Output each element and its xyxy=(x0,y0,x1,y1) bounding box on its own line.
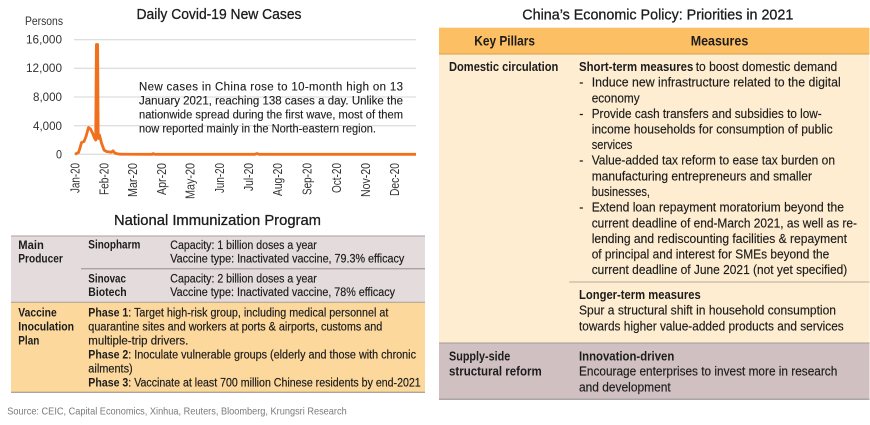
short-term measures xyxy=(579,60,857,277)
y axis labels: 8,000 xyxy=(33,90,62,104)
phase 1: Phase 1 xyxy=(88,308,129,320)
producer: sinovac biotech: Biotech xyxy=(88,287,127,299)
producer: sinopharm: Sinopharm xyxy=(88,240,140,252)
y axis labels: 0 xyxy=(56,148,62,162)
innovation-driven: and development xyxy=(579,380,671,394)
row: supply-side structural reform xyxy=(439,343,870,399)
short-term measures: - xyxy=(579,154,583,168)
annotation text: New cases in China rose to 10-month high on 13 xyxy=(139,82,403,94)
short-term measures: - xyxy=(579,107,583,121)
innovation-driven: Encourage enterprises to invest more in research xyxy=(579,365,837,379)
label: supply-side structural reform: structural reform xyxy=(449,365,542,379)
panel: china's economic policy xyxy=(439,6,870,399)
row: vaccine inoculation plan xyxy=(11,302,425,392)
y axis labels: 4,000 xyxy=(33,119,62,133)
panel: daily covid-19 new cases xyxy=(25,6,416,199)
label: main producer xyxy=(18,240,63,265)
longer-term measures xyxy=(579,288,844,333)
label: vaccine inoculation plan xyxy=(18,308,74,348)
x axis month labels: Oct-20 xyxy=(330,163,344,193)
annotation text: January 2021, reaching 138 cases a day. Unlike the xyxy=(139,95,403,107)
row: domestic circulation xyxy=(439,54,870,343)
label: domestic circulation: Domestic circulation xyxy=(449,60,558,74)
producer: sinovac biotech: Capacity: 2 billion doses a year xyxy=(170,274,317,286)
row: main producer xyxy=(11,236,425,302)
short-term measures: lending and rediscounting facilities & repayment xyxy=(592,232,847,246)
short-term measures: Value-added tax reform to ease tax burden on xyxy=(592,154,835,168)
innovation-driven xyxy=(579,349,837,394)
producer: sinovac biotech: Sinovac xyxy=(88,274,127,286)
producer: sinopharm xyxy=(88,240,405,265)
short-term measures: businesses, xyxy=(592,185,650,199)
x axis month labels: Mar-20 xyxy=(126,163,140,197)
short-term measures: - xyxy=(579,76,583,90)
short-term measures: services xyxy=(592,138,632,152)
short-term measures: to boost domestic demand xyxy=(696,60,837,74)
phase 1: multiple-trip drivers. xyxy=(88,336,188,348)
x axis month labels: Feb-20 xyxy=(97,163,111,195)
producer: sinopharm: Capacity: 1 billion doses a year xyxy=(170,240,317,252)
heading: daily covid-19 new cases: Daily Covid-19 New Cases xyxy=(136,6,302,23)
short-term measures: of principal and interest for SMEs beyond the xyxy=(592,248,829,262)
short-term measures: Provide cash transfers and subsidies to low- xyxy=(592,107,822,121)
panel: national immunization program xyxy=(11,212,425,392)
orange case line xyxy=(75,44,416,154)
short-term measures: economy xyxy=(592,91,640,105)
phase 3: Phase 3 xyxy=(88,378,128,390)
line chart: daily new cases xyxy=(25,14,416,199)
x axis month labels: May-20 xyxy=(184,163,198,199)
label: supply-side structural reform xyxy=(449,349,542,379)
annotation text: nationwide spread during the first wave, most of them xyxy=(139,109,403,121)
annotation text xyxy=(139,82,403,135)
label: main producer: Main xyxy=(18,240,44,252)
producer: sinovac biotech: Vaccine type: Inactivated vaccine, 78% efficacy xyxy=(170,287,395,299)
phase 1: quarantine sites and workers at ports & airports, customs and xyxy=(88,321,382,333)
short-term measures: manufacturing entrepreneurs and smaller xyxy=(592,169,812,183)
label: vaccine inoculation plan: Plan xyxy=(18,336,39,348)
x axis month labels: Jan-20 xyxy=(68,163,82,193)
label: vaccine inoculation plan: Vaccine xyxy=(18,308,57,320)
short-term measures: current deadline of June 2021 (not yet specified) xyxy=(592,263,847,277)
phase 2: ailments) xyxy=(88,364,133,376)
x axis month labels: Jun-20 xyxy=(213,163,227,193)
x axis month labels: Sep-20 xyxy=(301,163,315,195)
phase 1 xyxy=(88,308,389,348)
annotation text: now reported mainly in the North-eastern region. xyxy=(139,123,376,135)
y axis labels: Persons xyxy=(25,14,63,28)
producer: sinopharm: Vaccine type: Inactivated vaccine, 79.3% efficacy xyxy=(170,253,405,265)
short-term measures: - xyxy=(579,200,583,214)
longer-term measures: towards higher value-added products and services xyxy=(579,319,844,333)
y axis labels: 12,000 xyxy=(26,61,62,75)
short-term measures: Induce new infrastructure related to the digital xyxy=(592,76,841,90)
table header: Measures xyxy=(691,32,748,48)
y axis labels: 16,000 xyxy=(26,32,62,46)
short-term measures: income households for consumption of public xyxy=(592,123,833,137)
table header xyxy=(439,28,870,54)
phase 2 xyxy=(88,349,416,376)
phase 1: : Target high-risk group, including medical personnel at xyxy=(128,308,389,320)
x axis month labels: Aug-20 xyxy=(271,163,285,196)
longer-term measures: Spur a structural shift in household consumption xyxy=(579,304,836,318)
y axis labels xyxy=(25,14,63,162)
innovation-driven: Innovation-driven xyxy=(579,349,674,363)
x axis month labels: Dec-20 xyxy=(388,163,402,196)
x axis month labels xyxy=(68,163,402,199)
heading: china's economic policy priorities in 2021: China’s Economic Policy: Priorities in 2021 xyxy=(522,6,793,24)
x axis month labels: Nov-20 xyxy=(359,163,373,197)
phase 2: Phase 2 xyxy=(88,349,128,361)
longer-term measures: Longer-term measures xyxy=(579,288,701,302)
short-term measures: Extend loan repayment moratorium beyond the xyxy=(592,200,844,214)
phase 3: : Vaccinate at least 700 million Chinese residents by end-2021 xyxy=(128,378,421,390)
short-term measures: Short-term measures xyxy=(579,60,693,74)
label: supply-side structural reform: Supply-side xyxy=(449,349,510,363)
label: main producer: Producer xyxy=(18,253,63,265)
producer: sinovac biotech xyxy=(88,274,395,299)
x axis month labels: Jul-20 xyxy=(242,163,256,191)
phase 2: : Inoculate vulnerable groups (elderly and those with chronic xyxy=(128,349,416,361)
heading: national immunization program: National Immunization Program xyxy=(114,212,321,229)
source note: Source: CEIC, Capital Economics, Xinhua, Reuters, Bloomberg, Krungsri Research xyxy=(7,406,347,418)
table header: Key Pillars xyxy=(474,32,535,48)
label: vaccine inoculation plan: Inoculation xyxy=(18,321,74,333)
short-term measures: current deadline of end-March 2021, as well as re- xyxy=(592,216,857,230)
x axis month labels: Apr-20 xyxy=(155,163,169,195)
